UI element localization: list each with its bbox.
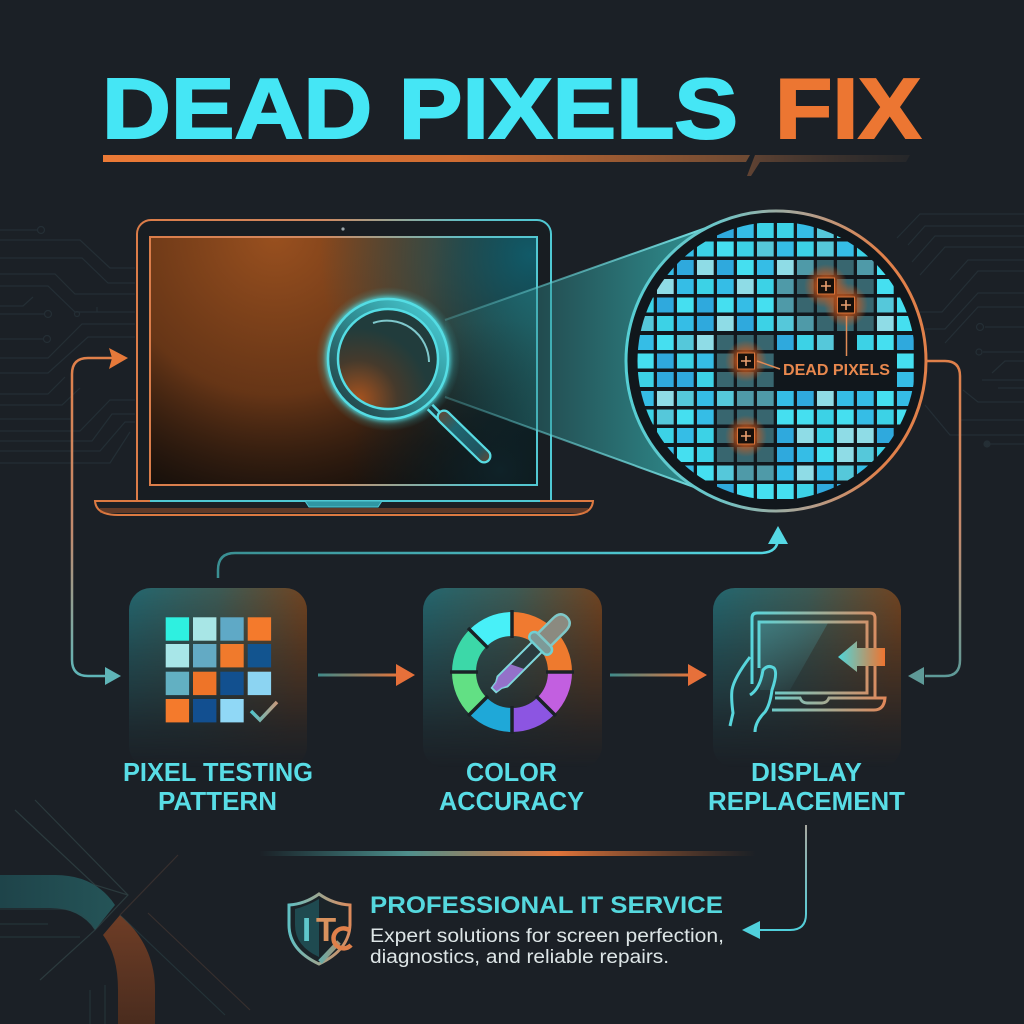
icon: IT shield: [289, 894, 351, 964]
divider bar: [259, 851, 756, 856]
footer text: professional IT service: diagnostics, and reliable repairs.: [370, 947, 669, 968]
right circuit traces: [897, 214, 1024, 447]
title: Dead Pixels Fix: DEAD PIXELS: [102, 62, 738, 157]
pixel grid: [637, 223, 914, 499]
icon: colour test grid: [166, 617, 277, 722]
laptop screen: [150, 237, 537, 485]
label: display replacement: REPLACEMENT: [708, 786, 905, 816]
panel: pixel testing pattern: [123, 588, 313, 816]
decorative corner bands: [0, 800, 250, 1024]
left circuit traces: [0, 226, 135, 463]
magnification beam: [445, 228, 708, 492]
panel: display replacement: [708, 588, 905, 816]
icon: colour wheel: [450, 610, 574, 734]
dead pixels label: DEAD PIXELS: [783, 362, 890, 379]
arrow: display replacement to service: [742, 825, 806, 939]
icon: IT shield: T: [316, 911, 336, 948]
label: pixel testing pattern: [123, 757, 313, 816]
arrow: colour accuracy to display replacement: [610, 664, 707, 686]
label: pixel testing pattern: PIXEL TESTING: [123, 757, 313, 787]
dead pixels label: [757, 316, 890, 379]
footer text: professional IT service: Expert solutions for screen perfection,: [370, 926, 724, 947]
label: color accuracy: COLOR: [466, 757, 557, 787]
laptop base: [95, 501, 593, 515]
icon: laptop with hand and arrow: [730, 613, 885, 732]
arrow: pixel test to colour accuracy: [318, 664, 415, 686]
title underline: [103, 155, 910, 176]
dead pixel markers: [725, 264, 868, 457]
title: Dead Pixels Fix: [102, 62, 921, 157]
icon: magnifying glass: [316, 287, 484, 456]
panel: color accuracy: [423, 588, 602, 816]
label: display replacement: [708, 757, 905, 816]
title: Dead Pixels Fix: FIX: [775, 62, 921, 157]
footer text: professional IT service: [370, 892, 724, 968]
label: color accuracy: [439, 757, 584, 816]
laptop: [95, 220, 593, 515]
label: pixel testing pattern: PATTERN: [158, 786, 277, 816]
arrow: pixel test to magnified view: [218, 526, 788, 578]
arrow: laptop to pixel test loop: [72, 348, 128, 685]
icon: IT shield: I: [302, 911, 311, 948]
callout: magnified pixel circle: [626, 211, 926, 511]
label: display replacement: DISPLAY: [751, 757, 862, 787]
label: color accuracy: ACCURACY: [439, 786, 584, 816]
arrow: magnified view to display replacement: [908, 361, 960, 685]
icon: eyedropper: [484, 607, 577, 700]
footer text: professional IT service: PROFESSIONAL IT SERVICE: [370, 892, 723, 919]
